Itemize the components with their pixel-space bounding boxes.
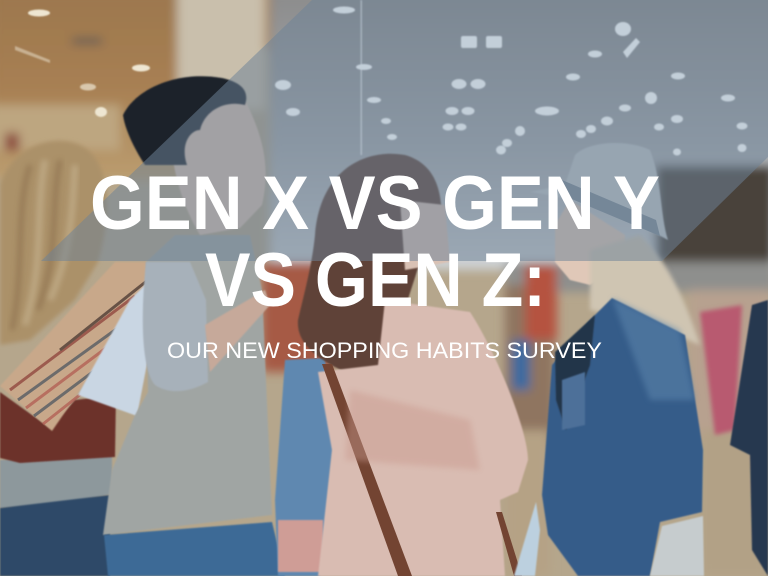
woman with denim jacket and hat — [514, 143, 704, 576]
warm ceiling lights outside overlay — [15, 10, 150, 117]
woman with blond hair — [0, 141, 112, 576]
scarf — [275, 358, 333, 576]
blue-grey diamond overlay — [41, 0, 768, 261]
mall interior — [0, 0, 768, 444]
woman with pink shirt — [298, 154, 528, 576]
subtitle: OUR NEW SHOPPING HABITS SURVEY — [167, 338, 602, 363]
ceiling lights under overlay — [275, 0, 748, 156]
title — [90, 161, 660, 323]
navy garment — [730, 300, 768, 576]
rack of pink clothes — [700, 305, 742, 435]
title: GEN X VS GEN Y — [90, 161, 660, 246]
white shopping bag — [78, 284, 147, 416]
striped shopping bag — [0, 262, 146, 432]
leather bag — [0, 392, 116, 463]
man with grey sweater — [103, 76, 285, 576]
title: VS GEN Z: — [205, 238, 546, 323]
